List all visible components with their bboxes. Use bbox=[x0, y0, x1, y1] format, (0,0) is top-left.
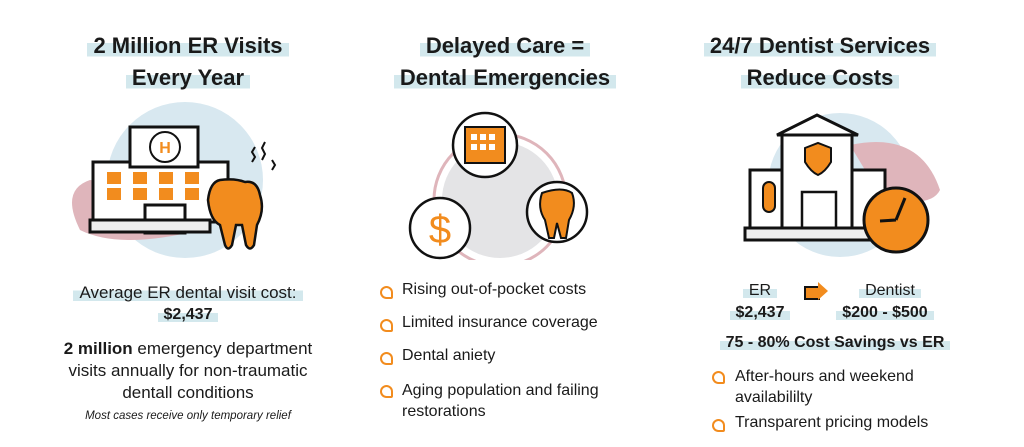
text: Transparent pricing models bbox=[735, 414, 928, 431]
bullet list: right bbox=[712, 368, 928, 432]
text: restorations bbox=[402, 403, 486, 420]
title: left: 2 Million ER Visits bbox=[93, 33, 283, 58]
title: middle: Delayed Care = bbox=[426, 33, 584, 58]
text: Rising out-of-pocket costs bbox=[402, 281, 586, 298]
illustration: hospital and tooth: H bbox=[159, 140, 171, 157]
title: left bbox=[87, 33, 289, 90]
title: middle bbox=[394, 33, 616, 90]
text: After-hours and weekend bbox=[735, 368, 914, 385]
cost comparison: right: $2,437 bbox=[736, 304, 784, 321]
text: Dental aniety bbox=[402, 347, 495, 364]
title: left: Every Year bbox=[132, 65, 244, 90]
text block: left: dentall conditions bbox=[122, 383, 254, 402]
title: middle: Dental Emergencies bbox=[400, 65, 610, 90]
cost comparison: right: Dentist bbox=[865, 282, 915, 299]
text block: left bbox=[64, 283, 312, 422]
text block: left: Average ER dental visit cost: bbox=[79, 283, 296, 302]
text block: left: $2,437 bbox=[164, 306, 212, 323]
text block: left: Most cases receive only temporary relief bbox=[85, 410, 291, 422]
bullet list: middle bbox=[380, 281, 599, 420]
illustration: delayed care cycle: $ bbox=[429, 208, 451, 252]
text: Aging population and failing bbox=[402, 382, 599, 399]
cost comparison: right: $200 - $500 bbox=[842, 304, 928, 321]
text block: left: 2 million emergency department bbox=[64, 339, 312, 358]
illustration: hospital and tooth bbox=[72, 102, 276, 258]
text: Limited insurance coverage bbox=[402, 314, 598, 331]
title: right: Reduce Costs bbox=[747, 65, 893, 90]
illustration: dental office with clock bbox=[744, 113, 940, 257]
illustration: delayed care cycle bbox=[408, 112, 588, 260]
title: right: 24/7 Dentist Services bbox=[710, 33, 930, 58]
text: availabililty bbox=[735, 389, 812, 406]
text block: left: visits annually for non-traumatic bbox=[68, 361, 308, 380]
cost comparison: right bbox=[720, 282, 950, 351]
cost comparison: right: 75 - 80% Cost Savings vs ER bbox=[726, 334, 944, 351]
title: right bbox=[704, 33, 936, 90]
cost comparison: right: ER bbox=[749, 282, 771, 299]
